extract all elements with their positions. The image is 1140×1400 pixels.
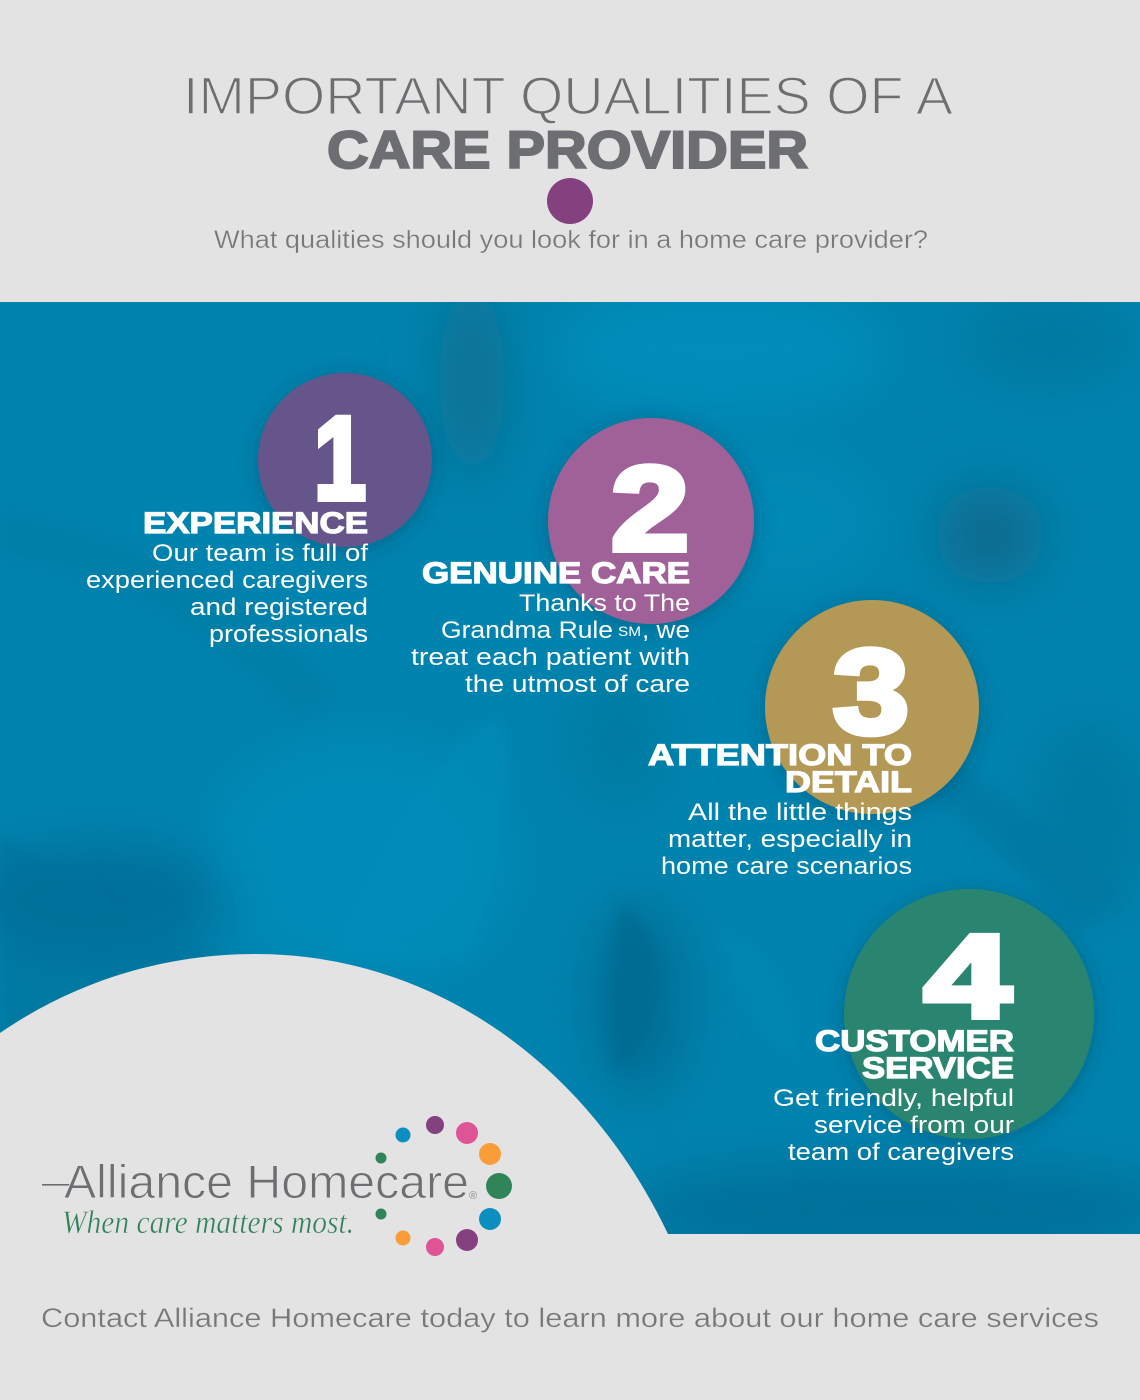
- footer call to action: Contact Alliance Homecare today to learn more about our home care services: [41, 1303, 1099, 1333]
- body: professionals: [209, 621, 368, 648]
- title line 2: CARE PROVIDER: [327, 121, 808, 180]
- body: , we: [642, 617, 690, 644]
- tagline: When care matters most.: [62, 1205, 354, 1241]
- circle 3: [765, 600, 979, 814]
- quality 1: experience: [86, 393, 368, 648]
- circle 2: [548, 418, 754, 624]
- subtitle: What qualities should you look for in a home care provider?: [214, 226, 928, 254]
- heading: ATTENTION TO: [648, 739, 912, 772]
- body: Get friendly, helpful: [773, 1085, 1014, 1112]
- number 4: 4: [924, 911, 1011, 1043]
- quality 4: customer service: [773, 911, 1014, 1166]
- logo: Alliance Homecare: [42, 1116, 512, 1256]
- body: Grandma Rule: [441, 617, 613, 644]
- logo dot ring: [376, 1116, 512, 1256]
- body: matter, especially in: [668, 826, 912, 853]
- title line 1: IMPORTANT QUALITIES OF A: [183, 67, 954, 126]
- logo wordmark: Alliance Homecare: [64, 1155, 469, 1208]
- quality 3: attention to detail: [648, 625, 912, 880]
- body: and registered: [190, 594, 368, 621]
- registered mark: ®: [469, 1190, 477, 1202]
- circle 1: [258, 373, 432, 547]
- curved grey logo panel: [0, 954, 668, 1400]
- number 1: 1: [314, 393, 366, 525]
- body: treat each patient with: [411, 644, 690, 671]
- photo background panel: [0, 280, 1140, 1260]
- body: Our team is full of: [152, 540, 368, 567]
- number 3: 3: [833, 625, 909, 759]
- quality 2: genuine care: [411, 442, 690, 698]
- logo line stroke: [42, 1184, 74, 1186]
- body: experienced caregivers: [86, 567, 368, 594]
- body: SM: [618, 623, 641, 639]
- body: service from our: [814, 1112, 1014, 1139]
- number 2: 2: [611, 442, 689, 576]
- body: Thanks to The: [519, 590, 690, 617]
- circle 4: [844, 889, 1094, 1139]
- body: team of caregivers: [788, 1139, 1014, 1166]
- purple dot: [547, 178, 593, 224]
- body: the utmost of care: [465, 671, 690, 698]
- heading: SERVICE: [862, 1052, 1014, 1085]
- heading: CUSTOMER: [815, 1025, 1014, 1058]
- header: [183, 67, 954, 254]
- heading: DETAIL: [785, 766, 912, 799]
- heading: EXPERIENCE: [143, 507, 368, 540]
- heading: GENUINE CARE: [422, 557, 690, 590]
- body: All the little things: [688, 799, 912, 826]
- body: home care scenarios: [661, 853, 912, 880]
- footer band: [0, 1234, 1140, 1400]
